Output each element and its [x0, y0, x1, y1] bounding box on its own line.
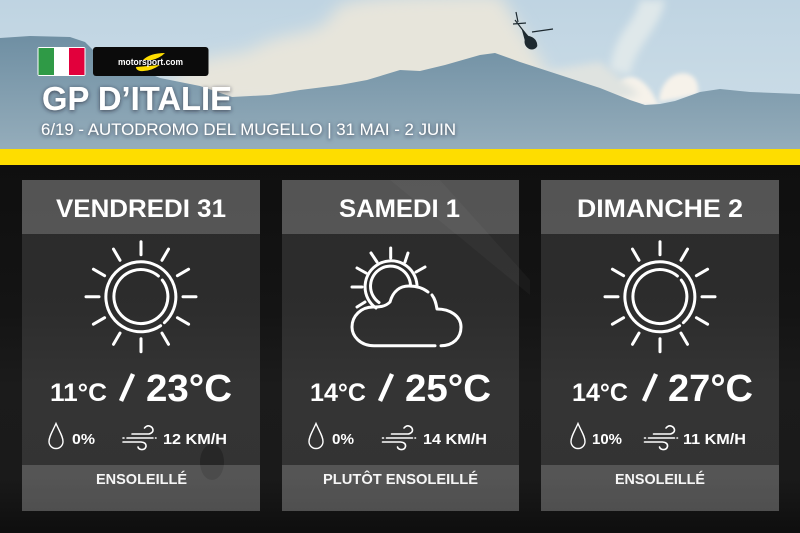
- wind speed: 14 KM/H: [423, 431, 487, 448]
- wind speed: 11 KM/H: [683, 431, 746, 448]
- temperatures: 25°C: [405, 368, 491, 410]
- panel: samedi: [282, 180, 519, 511]
- temperatures: 14°C: [310, 379, 366, 407]
- temperatures: [50, 368, 232, 410]
- temperatures: [310, 368, 491, 410]
- day heading: VENDREDI 31: [56, 195, 226, 223]
- motorsport.com logo: motorsport.com: [118, 57, 183, 68]
- icon: sun: [605, 242, 715, 352]
- background photo: sky and mountains: [0, 0, 800, 150]
- wind speed: 12 KM/H: [163, 431, 227, 448]
- conditions: ENSOLEILLÉ: [96, 471, 187, 488]
- icon: wind: [382, 426, 416, 450]
- conditions: PLUTÔT ENSOLEILLÉ: [323, 470, 478, 488]
- icon: wind: [123, 426, 156, 450]
- precipitation: 0%: [72, 431, 95, 448]
- temperatures: [572, 368, 753, 410]
- day heading: DIMANCHE 2: [577, 195, 743, 223]
- conditions: ENSOLEILLÉ: [615, 471, 705, 488]
- background photo: dark circuit: [0, 165, 800, 533]
- panel: vendredi: [22, 180, 260, 511]
- icon: water drop: [49, 424, 63, 448]
- motorsport.com logo: [93, 47, 208, 76]
- precipitation: 0%: [332, 431, 354, 448]
- icon: sun: [86, 242, 196, 352]
- icon: wind: [644, 426, 678, 450]
- icon: sun behind cloud: [352, 248, 461, 346]
- temperatures: 27°C: [668, 368, 753, 410]
- title: GP D’ITALIE: [42, 80, 232, 117]
- panel: dimanche: [541, 180, 779, 511]
- mountains: [0, 36, 800, 150]
- clouds: [165, 0, 698, 110]
- temperatures: 14°C: [572, 379, 628, 407]
- icon: water drop: [309, 424, 323, 448]
- icon: water drop: [571, 424, 585, 448]
- yellow band: [0, 149, 800, 165]
- temperatures: 23°C: [146, 368, 232, 410]
- temperatures: 11°C: [50, 379, 107, 407]
- subtitle: 6/19 - AUTODROMO DEL MUGELLO | 31 MAI - 2 JUIN: [41, 121, 456, 139]
- helicopter: [513, 12, 553, 49]
- flag of Italy: [38, 47, 86, 76]
- day heading: SAMEDI 1: [339, 195, 460, 223]
- precipitation: 10%: [592, 431, 622, 448]
